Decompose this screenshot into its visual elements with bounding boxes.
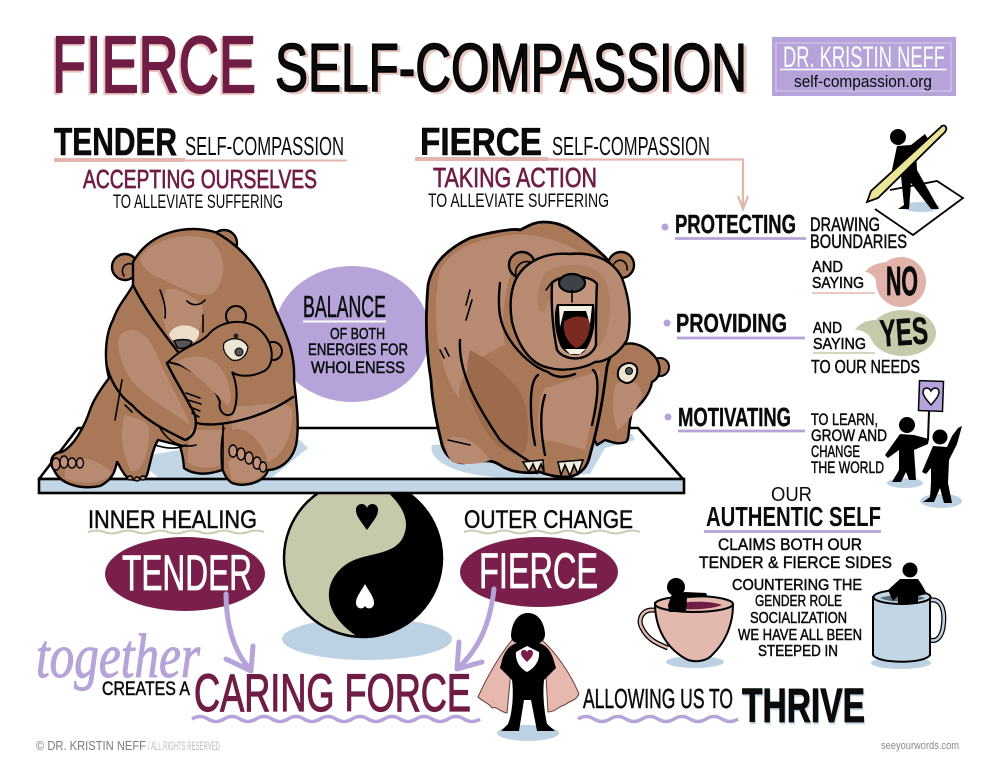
heading: inner healing: INNER HEALING <box>88 506 257 534</box>
fur patches <box>65 236 292 483</box>
fierce fur patches <box>436 234 600 464</box>
text: countering gender role socialization: WE HAVE ALL BEEN <box>738 627 862 644</box>
icon: mug with person <box>871 562 944 669</box>
say no bubble: SAYING <box>812 275 864 292</box>
say yes bubble: TO OUR NEEDS <box>811 357 920 377</box>
icon: protesters with heart sign <box>885 381 962 508</box>
allowing us to thrive: ALLOWING US TO <box>583 683 733 714</box>
balance oval: ENERGIES FOR <box>308 340 408 359</box>
heading: tender self-compassion: ACCEPTING OURSELVES <box>83 164 317 194</box>
text: countering gender role socialization: SOCIALIZATION <box>750 610 847 627</box>
item: motivating: THE WORLD <box>811 458 884 477</box>
icon: superhero with cape <box>478 613 579 741</box>
heading: outer change: OUTER CHANGE <box>464 506 633 534</box>
balance oval: OF BOTH <box>330 326 385 343</box>
small cub behind <box>590 343 669 445</box>
mother arm and contour lines <box>107 285 293 470</box>
heading: tender self-compassion <box>54 121 347 213</box>
arrow: tender to caring force <box>226 594 253 671</box>
heading: tender self-compassion: SELF-COMPASSION <box>185 131 344 161</box>
balance oval: BALANCE <box>303 289 386 324</box>
right ear <box>608 252 634 278</box>
tender oval: TENDER <box>122 545 252 601</box>
bear: fierce roaring mother with cub <box>426 222 669 477</box>
feet toes <box>52 445 266 481</box>
caring force: CARING FORCE <box>194 664 471 723</box>
say no bubble: AND <box>812 259 843 276</box>
title: FIERCE <box>52 20 256 109</box>
copyright <box>36 738 220 753</box>
text: countering gender role socialization: STEEPED IN <box>758 643 838 660</box>
item: motivating: CHANGE <box>811 442 860 461</box>
say yes bubble: YES <box>879 310 929 356</box>
big body <box>426 222 628 477</box>
tender oval <box>105 537 265 611</box>
mother muzzle <box>160 289 205 348</box>
bear: tender mother hugging cub <box>51 229 298 487</box>
left ear <box>509 252 535 278</box>
heading: tender self-compassion: TO ALLEVIATE SUFFERING <box>113 192 283 213</box>
heading: fierce self-compassion: SELF-COMPASSION <box>552 131 710 161</box>
heading: fierce self-compassion: TO ALLEVIATE SUFFERING <box>428 191 609 212</box>
heading: fierce self-compassion <box>415 121 710 212</box>
claws <box>523 460 583 476</box>
item: motivating: TO LEARN, <box>811 410 878 429</box>
item: providing: PROVIDING <box>676 308 787 338</box>
seesaw board <box>39 428 684 493</box>
author badge <box>772 37 956 96</box>
say yes bubble: SAYING <box>813 336 866 353</box>
copyright: © DR. KRISTIN NEFF <box>36 738 146 753</box>
say yes bubble: AND <box>813 320 842 337</box>
allowing us to thrive <box>578 680 865 733</box>
icon: teacup with person <box>640 578 733 668</box>
icon: person drawing boundary with pencil <box>867 125 963 235</box>
website credit: seeyourwords.com <box>881 740 959 752</box>
arrow: fierce to caring force <box>457 589 494 669</box>
say no bubble <box>812 257 926 307</box>
balance oval <box>274 266 430 402</box>
head <box>511 254 630 370</box>
ear left <box>112 254 138 280</box>
cub <box>168 306 282 415</box>
balance oval: WHOLENESS <box>311 358 405 377</box>
fierce oval: FIERCE <box>479 543 598 599</box>
heading: tender self-compassion: TENDER <box>54 121 177 164</box>
heading: fierce self-compassion: TAKING ACTION <box>433 162 597 193</box>
text: countering gender role socialization <box>732 577 862 660</box>
text: claims both sides <box>699 535 892 572</box>
item: protecting: BOUNDARIES <box>810 232 907 253</box>
item: protecting: DRAWING <box>810 215 880 236</box>
say yes bubble <box>811 310 936 377</box>
text: countering gender role socialization: COUNTERING THE <box>732 577 862 594</box>
title <box>52 20 747 109</box>
contour lines <box>440 283 597 462</box>
heading: fierce self-compassion: FIERCE <box>420 121 542 164</box>
item: protecting <box>662 209 907 253</box>
text: / ALL RIGHTS RESERVED <box>148 739 220 753</box>
arrow: fierce to protecting <box>548 160 748 209</box>
item: motivating: MOTIVATING <box>678 402 791 432</box>
item: motivating <box>664 402 887 477</box>
author badge: self-compassion.org <box>794 72 932 91</box>
heading: our authentic self <box>704 484 881 532</box>
allowing us to thrive: THRIVE <box>742 680 865 733</box>
body <box>51 229 298 487</box>
yin yang balance <box>282 479 452 660</box>
heading: our authentic self: AUTHENTIC SELF <box>706 501 881 532</box>
text: countering gender role socialization: GENDER ROLE <box>755 593 842 610</box>
text: claims both sides: TENDER & FIERCE SIDES <box>699 553 892 572</box>
head shading <box>538 265 610 352</box>
together script: together <box>36 623 201 691</box>
heading: our authentic self: OUR <box>771 484 812 506</box>
ear right <box>211 230 237 256</box>
creates a: CREATES A <box>102 679 190 700</box>
item: protecting: PROTECTING <box>675 209 796 239</box>
roaring mouth <box>546 274 597 358</box>
item: motivating: GROW AND <box>811 426 887 445</box>
title: SELF-COMPASSION <box>275 30 747 106</box>
say no bubble: NO <box>886 258 918 304</box>
fierce oval <box>460 537 618 607</box>
text: claims both sides: CLAIMS BOTH OUR <box>718 535 862 554</box>
